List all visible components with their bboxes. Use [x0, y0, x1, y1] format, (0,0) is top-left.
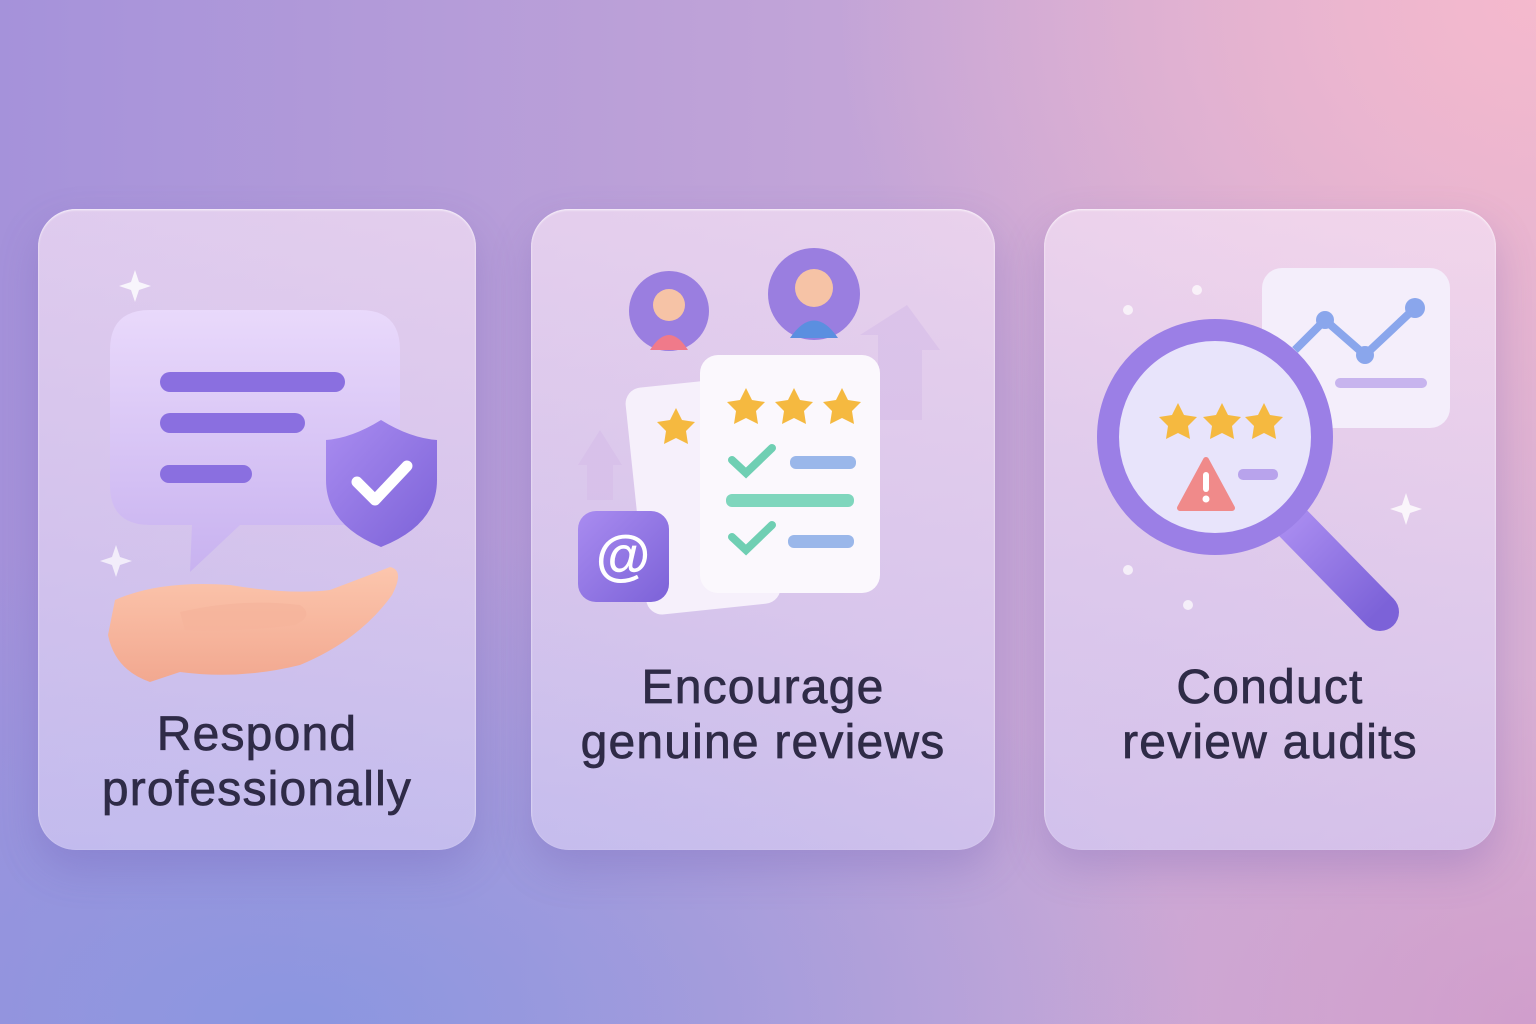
panel: respond professionally — [38, 209, 476, 850]
icon: review sheets with avatars — [578, 248, 940, 616]
icon: chat bubble with shield and hand — [100, 270, 437, 682]
heading: respond professionally — [102, 708, 412, 816]
panel: conduct review audits — [1044, 209, 1496, 850]
icon: review sheets with avatars: @ — [596, 523, 650, 586]
panel: encourage genuine reviews — [531, 209, 995, 850]
heading: respond professionally: professionally — [102, 763, 412, 816]
heading: conduct review audits — [1122, 661, 1418, 769]
heading: encourage genuine reviews: Encourage — [642, 661, 884, 714]
heading: encourage genuine reviews: genuine reviews — [581, 716, 945, 769]
heading: conduct review audits: Conduct — [1176, 661, 1364, 714]
heading: conduct review audits: review audits — [1122, 716, 1418, 769]
heading: respond professionally: Respond — [157, 708, 357, 761]
icon: magnifier with chart — [1108, 268, 1450, 612]
heading: encourage genuine reviews — [581, 661, 945, 769]
